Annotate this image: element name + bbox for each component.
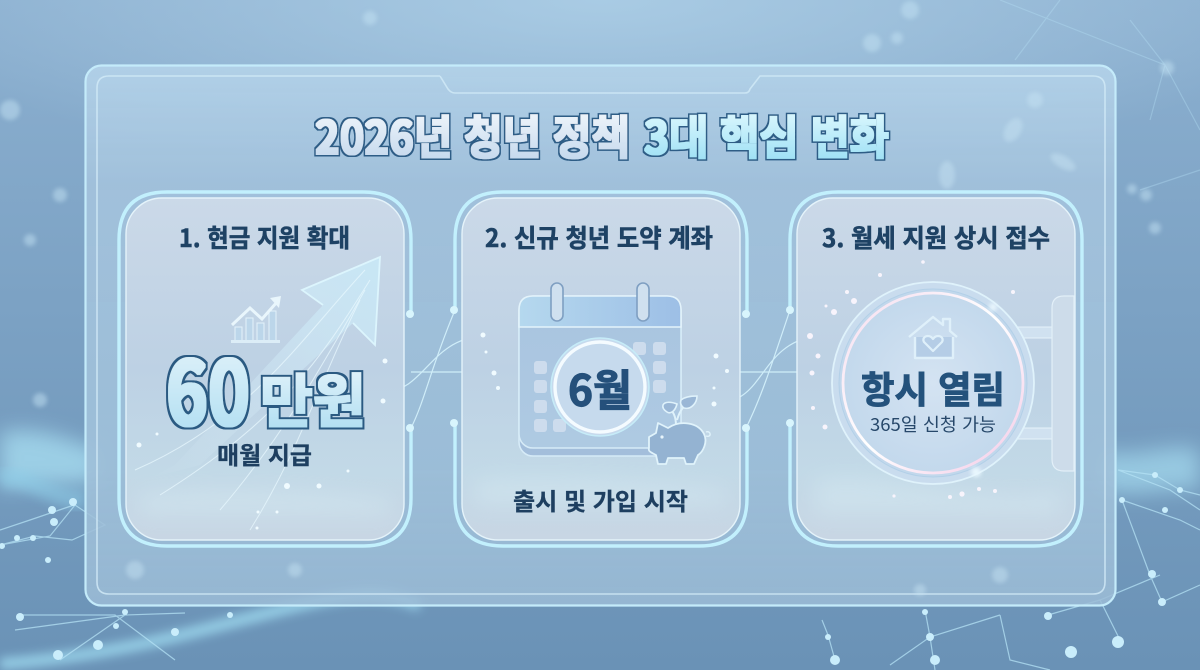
icon: piggy bank with sprout — [649, 396, 710, 464]
background: network nodes — [0, 472, 1183, 665]
panel: glass frame — [86, 66, 1116, 606]
card 2 caption: 출시 및 가입 시작 — [513, 482, 688, 517]
card 2 heading: 2. 신규 청년 도약 계좌 — [485, 219, 713, 255]
card 2 panel — [450, 192, 750, 546]
open door disc — [832, 282, 1034, 484]
icon: house with heart — [909, 317, 957, 358]
card haze bands — [140, 477, 1060, 515]
big number: 60만원: 만원 — [260, 355, 366, 439]
frame decorations: blurred dots — [126, 92, 1078, 596]
card 1 heading: 1. 현금 지원 확대 — [179, 219, 350, 255]
background: blurred bokeh — [0, 1, 1174, 407]
title: 3대 핵심 변화 — [644, 102, 889, 168]
card 1 sparkles — [136, 358, 388, 530]
card 3 sparkles — [807, 260, 1015, 499]
title — [315, 102, 889, 168]
icon: growth chart — [231, 296, 281, 343]
door text: 항시 열림 — [861, 360, 1005, 414]
calendar badge: 6월 — [551, 338, 649, 436]
icon: rising arrow — [135, 257, 380, 530]
card 1 caption: 매월 지급 — [217, 436, 312, 471]
card 2 sparkles — [480, 332, 729, 406]
title: 2026년 청년 정책 — [315, 102, 630, 168]
door text: 365일 신청 가능 — [870, 411, 996, 437]
door text — [861, 360, 1005, 437]
connectors between cards — [385, 310, 815, 428]
card 3 heading: 3. 월세 지원 상시 접수 — [822, 219, 1050, 255]
card 1 panel — [119, 192, 414, 546]
calendar badge: 6월: 6월 — [568, 357, 632, 419]
card 3 panel — [786, 192, 1082, 546]
icon: calendar — [519, 283, 681, 456]
big number: 60만원 — [166, 324, 366, 451]
icon: door handle — [1015, 296, 1074, 471]
big number: 60만원: 60 — [166, 324, 250, 451]
